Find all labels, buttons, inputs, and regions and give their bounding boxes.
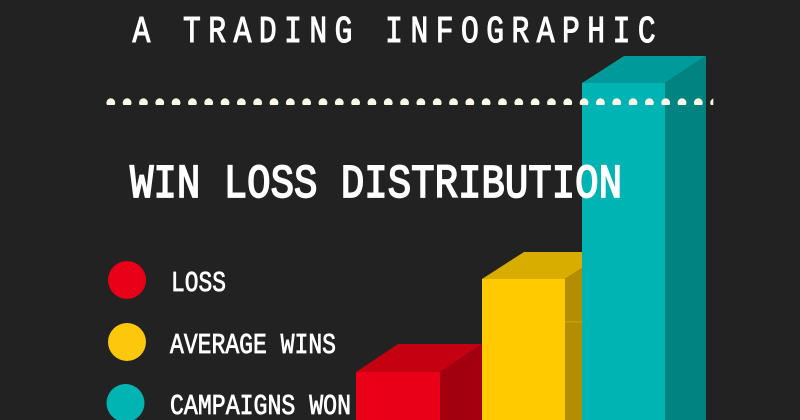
legend item: loss <box>108 261 226 300</box>
legend item: average wins: AVERAGE WINS <box>170 329 336 362</box>
legend item: loss: LOSS <box>171 267 226 300</box>
bar chart <box>356 56 706 420</box>
legend item: campaigns won <box>106 384 351 420</box>
red loss bar <box>356 344 482 420</box>
infographic <box>106 16 714 420</box>
heading: WIN LOSS DISTRIBUTION <box>130 159 622 212</box>
title: A TRADING INFOGRAPHIC <box>132 12 663 54</box>
teal campaigns won bar <box>582 56 706 420</box>
legend item: average wins <box>108 323 336 362</box>
yellow average wins bar <box>482 252 607 420</box>
legend <box>106 261 351 420</box>
dotted divider <box>106 98 714 105</box>
